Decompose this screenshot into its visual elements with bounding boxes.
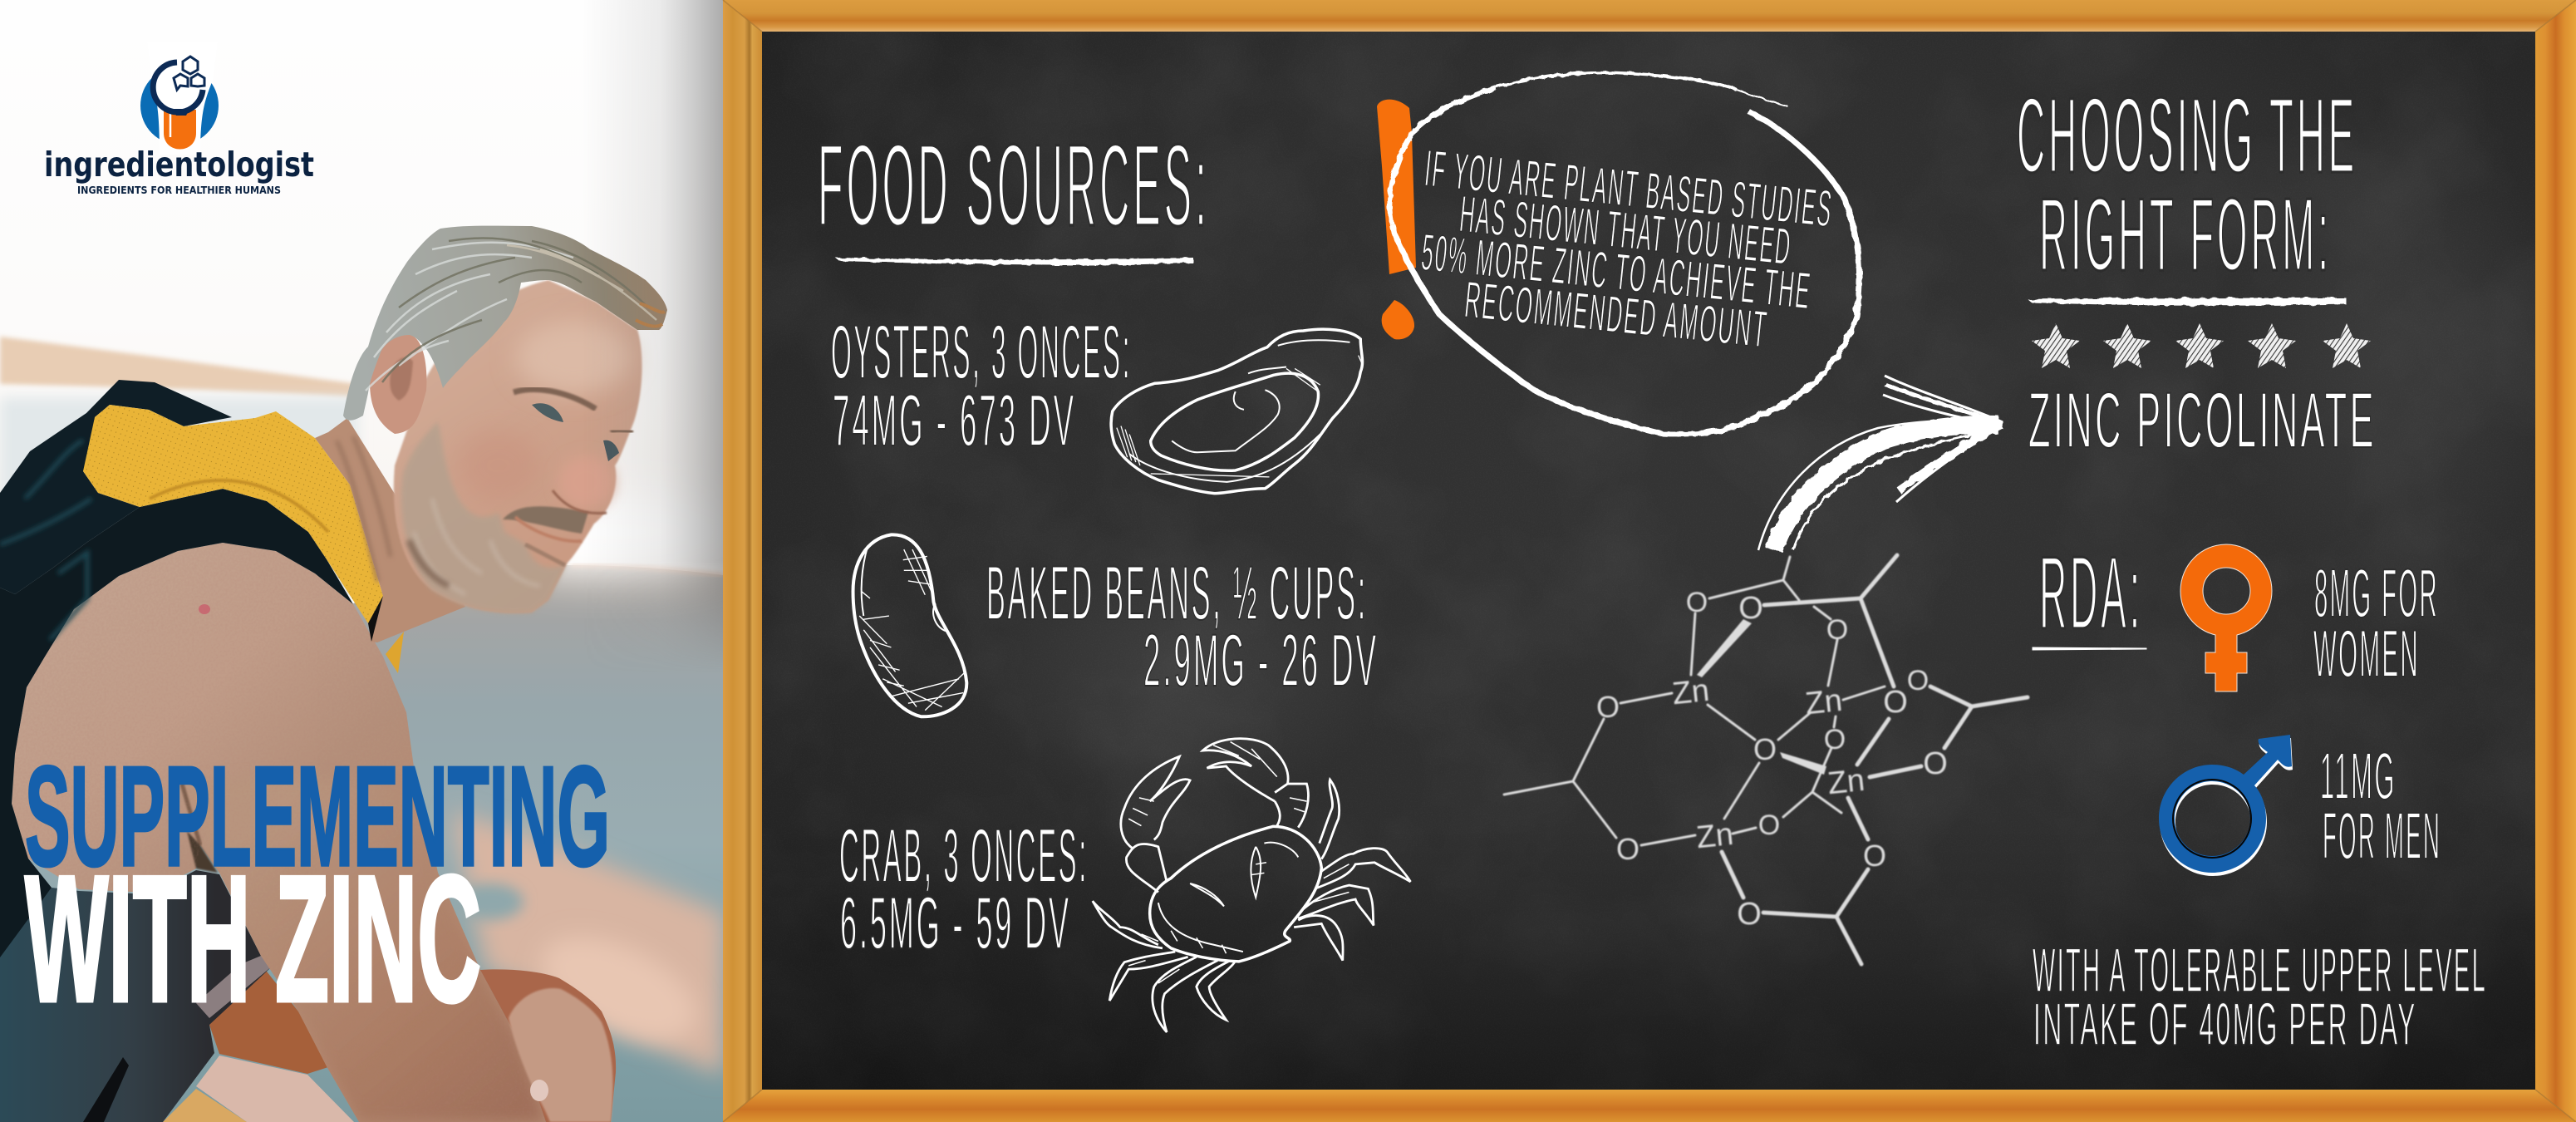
atoms: O <box>1686 587 1708 618</box>
icon: orange exclamation mark <box>1377 100 1416 339</box>
ear <box>370 335 426 434</box>
yellow hood lining <box>83 405 383 623</box>
hand <box>480 969 616 1122</box>
callout: plant based note <box>1377 72 1859 434</box>
face <box>394 280 642 613</box>
panel: food sources <box>818 120 1410 1032</box>
crab text <box>839 814 1089 964</box>
callout text: RECOMMENDED AMOUNT <box>1463 271 1771 359</box>
atoms: O <box>1737 897 1762 932</box>
panel: food sources: CRAB, 3 ONCES: <box>839 814 1089 898</box>
oyster text <box>831 310 1132 461</box>
logo icon <box>140 42 219 155</box>
atoms: O <box>1863 839 1886 873</box>
neck <box>315 418 465 642</box>
panel: choosing the right form <box>2017 76 2377 465</box>
chalkboard surface <box>762 32 2559 1090</box>
atoms: Zn <box>1803 683 1844 721</box>
arrow to zinc picolinate <box>1758 376 2003 550</box>
vest <box>0 489 353 957</box>
atoms: O <box>1616 832 1639 866</box>
atoms: O <box>1596 690 1620 724</box>
icon: bean <box>853 534 966 716</box>
atoms: Zn <box>1694 817 1735 855</box>
body and arm skin <box>0 532 548 1122</box>
shorts <box>0 870 270 1122</box>
hair <box>343 226 667 421</box>
eyes and brows <box>514 390 596 409</box>
panel: food sources: 6.5MG - 59 DV <box>840 881 1071 964</box>
atoms <box>1596 587 1948 932</box>
icon: male symbol <box>2159 735 2293 876</box>
text: 2.9MG - 26 DV <box>1143 618 1379 701</box>
sand and rail <box>163 1089 247 1122</box>
far forearm <box>209 964 331 1074</box>
beard <box>401 421 567 613</box>
moustache and mouth <box>503 506 588 534</box>
text: BAKED BEANS, ½ CUPS: <box>986 551 1368 636</box>
chalk underline <box>2028 298 2346 306</box>
atoms: O <box>1738 591 1763 626</box>
panel: RDA <box>2033 536 2487 1058</box>
text: IF YOU ARE PLANT BASED STUDIES <box>1423 140 1836 239</box>
text: 50% MORE ZINC TO ACHIEVE THE <box>1419 224 1814 321</box>
nose <box>553 490 607 514</box>
pink boardwalk band <box>452 812 724 1075</box>
atoms: O <box>1907 665 1929 696</box>
oyster text: 74MG - 673 DV <box>833 379 1076 461</box>
callout text <box>1419 140 1836 359</box>
five star rating <box>2032 323 2371 368</box>
text: HAS SHOWN THAT YOU NEED <box>1458 185 1795 276</box>
molecule diagram: zinc picolinate <box>1504 555 2028 964</box>
tolerable upper level note <box>2033 935 2487 1058</box>
RDA underline <box>2033 647 2146 650</box>
title <box>25 737 610 1039</box>
atoms: O <box>1923 746 1948 781</box>
title: WITH ZINC <box>25 838 481 1039</box>
atoms: O <box>1826 614 1848 646</box>
bonds <box>1504 555 2028 964</box>
chalk circle <box>1389 72 1859 434</box>
chalkboard frame <box>723 0 2576 1122</box>
bean text <box>986 551 1379 701</box>
icon: female symbol <box>2180 544 2272 691</box>
panel: RDA: RDA: <box>2039 536 2143 651</box>
horizon band <box>0 337 357 397</box>
icon: oyster <box>1111 329 1363 494</box>
atoms: O <box>1824 724 1846 755</box>
atoms: O <box>1883 685 1908 720</box>
atoms: Zn <box>1670 673 1711 711</box>
atoms: O <box>1753 732 1777 766</box>
atoms: O <box>1758 810 1780 841</box>
panel: food sources: OYSTERS, 3 ONCES: <box>831 310 1132 395</box>
icon: crab <box>1093 739 1410 1032</box>
logo <box>44 42 314 196</box>
logo wordmark: ingredientologist <box>44 145 314 185</box>
men text: 11MG <box>2320 739 2397 813</box>
panel: photo of man leaning on a railing <box>0 0 756 1122</box>
text: SUPPLEMENTING <box>25 737 610 896</box>
women text <box>2313 554 2439 691</box>
atoms: Zn <box>1826 763 1866 801</box>
panel: food sources: FOOD SOURCES: <box>818 120 1210 250</box>
men text <box>2320 739 2441 873</box>
heading: choosing the right form <box>2017 76 2357 293</box>
logo tagline: INGREDIENTS FOR HEALTHIER HUMANS <box>77 184 281 196</box>
ground <box>0 565 724 1122</box>
chalk underline <box>835 258 1193 265</box>
